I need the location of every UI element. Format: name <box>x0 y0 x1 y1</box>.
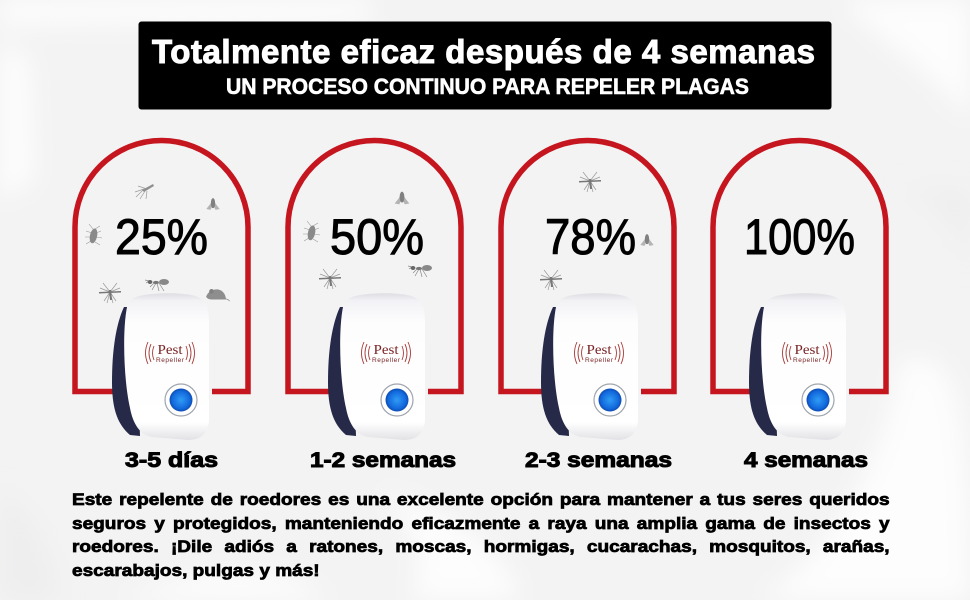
percent 25%: 25% <box>115 209 208 265</box>
description text block: seguros y protegidos, manteniendo eficazmente a raya una amplia gama de insectos y <box>72 514 890 533</box>
description text block: escarabajos, pulgas y más! <box>72 561 320 580</box>
insects: mosquito, fly, cockroach, spider, ant, mouse <box>85 184 230 303</box>
panel: 100% stage <box>713 140 886 472</box>
duration label: 2-3 semanas <box>525 449 672 472</box>
description text block: roedores. ¡Dile adiós a ratones, moscas, hormigas, cucarachas, mosquitos, arañas, <box>72 537 890 556</box>
device <box>541 293 638 440</box>
description text block: Este repelente de roedores es una excelente opción para mantener a tus seres queridos <box>72 490 890 509</box>
duration label: 4 semanas <box>744 449 868 472</box>
title banner <box>138 22 832 110</box>
panel: 50% stage <box>288 140 461 472</box>
device <box>328 293 425 440</box>
heading: Totalmente eficaz después de 4 semanas <box>152 33 815 70</box>
device <box>749 293 846 440</box>
percent 50%: 50% <box>330 209 424 265</box>
description text block <box>72 490 890 580</box>
percent 78%: 78% <box>545 209 636 265</box>
subheading: UN PROCESO CONTINUO PARA REPELER PLAGAS <box>226 74 749 99</box>
duration label: 1-2 semanas <box>310 449 456 472</box>
insects: fly, cockroach, spider, ant <box>303 192 432 289</box>
panel: 25% stage <box>75 140 248 472</box>
panel: 78% stage <box>501 140 674 472</box>
percent 100%: 100% <box>744 209 855 265</box>
device <box>112 293 209 440</box>
insects: spider, fly, spider <box>540 172 654 290</box>
duration label: 3-5 días <box>125 449 218 472</box>
